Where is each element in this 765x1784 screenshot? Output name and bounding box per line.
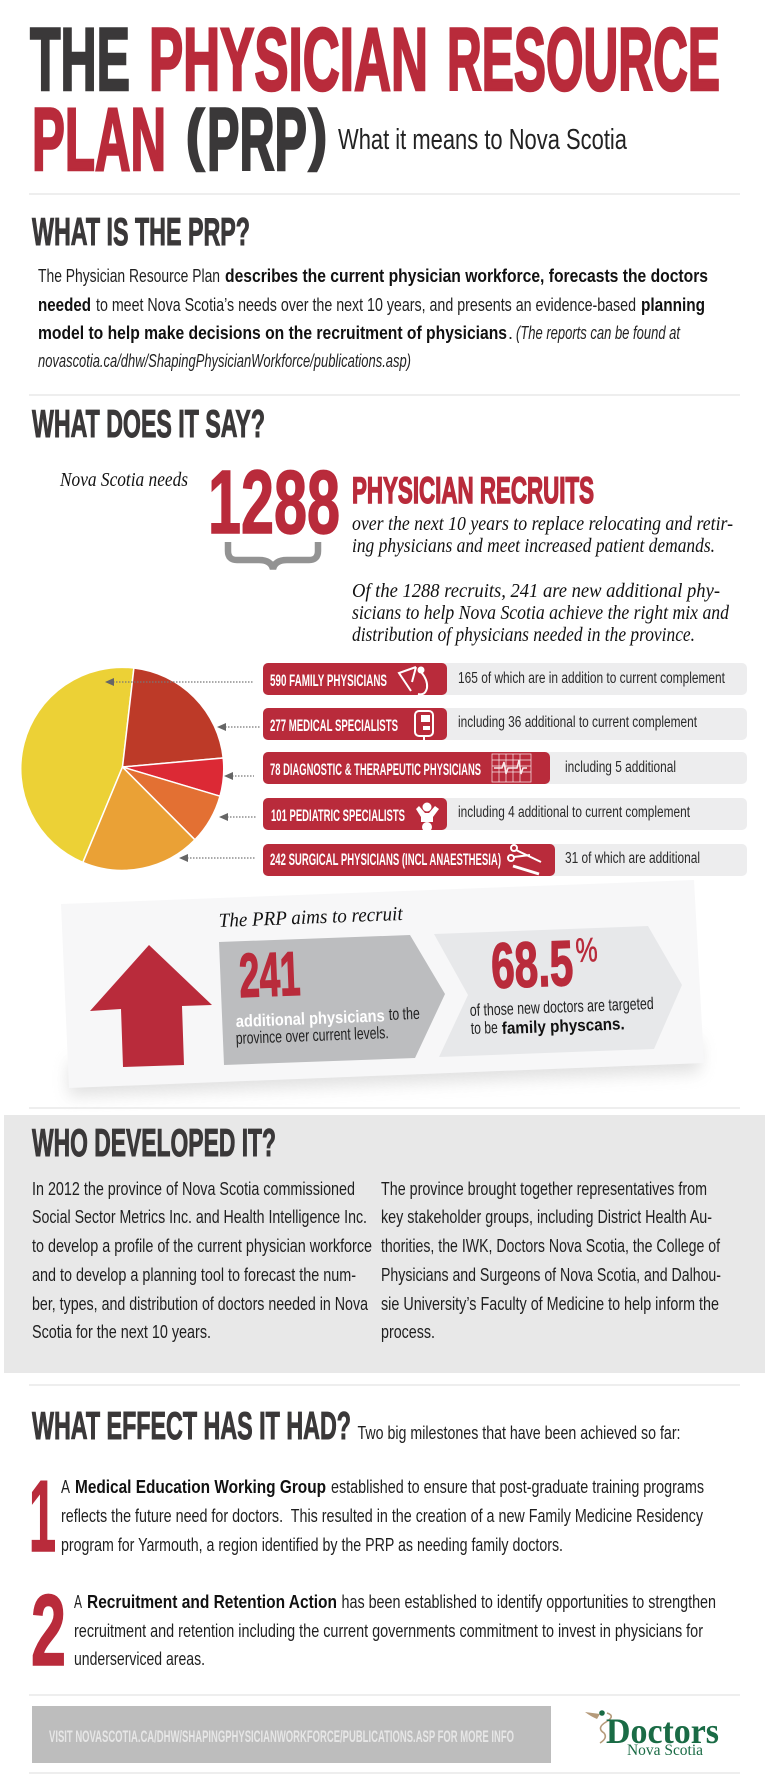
text block: left column: In 2012 the province of Nova Scotia commissioned [32, 1179, 355, 1199]
row: pediatric specialists [263, 798, 747, 832]
callout: 1288 physician recruits [59, 453, 733, 646]
heading: what effect has it had: WHAT EFFECT HAS IT HAD? [32, 1405, 351, 1448]
arrow: family physicians [105, 678, 253, 686]
icon: caduceus [585, 1710, 611, 1743]
callout: 241 additional physicians: 241 [238, 940, 301, 1011]
text block: PRP description [38, 266, 708, 371]
milestone 1: 1 [29, 1461, 56, 1573]
text block: right column: process. [381, 1322, 435, 1342]
row: diagnostic and therapeutic physicians [263, 752, 747, 784]
row: surgical physicians [263, 844, 747, 876]
arrow: medical specialists [217, 723, 260, 731]
milestone 1: Medical Education Working Group [75, 1477, 326, 1497]
logo: Doctors Nova Scotia: Doctors [606, 1711, 719, 1751]
text block: right column [381, 1179, 721, 1342]
title: THE [30, 9, 130, 109]
text block: PRP description: model to help make decisions on the recruitment of physicians [38, 323, 507, 343]
title: PRP [207, 89, 307, 189]
logo: Doctors Nova Scotia: Nova Scotia [627, 1742, 703, 1759]
callout: 1288 physician recruits: Of the 1288 recruits, 241 are new additional phy- [352, 580, 720, 602]
text block: PRP description: . [508, 323, 513, 343]
text block: PRP description: describes the current physician workforce, forecasts the doctors [225, 266, 708, 286]
callout: 68.5 percent: 68.5 [490, 927, 574, 1002]
row: family physicians: 590 FAMILY PHYSICIANS [270, 671, 387, 690]
footer link bar [32, 1706, 551, 1763]
title: PLAN [32, 89, 166, 189]
icon: up arrow [90, 945, 212, 1067]
callout: 68.5 percent: of those new doctors are targeted [469, 994, 654, 1020]
title [30, 9, 720, 189]
heading: who developed it: WHO DEVELOPED IT? [32, 1122, 276, 1165]
icon: surgical tools [508, 845, 541, 874]
text block: left column: to develop a profile of the current physician workforce [32, 1236, 372, 1256]
milestone 1 [29, 1461, 704, 1573]
panel: who developed it [4, 1115, 765, 1373]
callout: 1288 physician recruits: ing physicians and meet increased patient demands. [352, 535, 715, 557]
heading: what does it say: WHAT DOES IT SAY? [32, 403, 265, 446]
title: ( [186, 97, 205, 172]
milestone 2 [31, 1575, 716, 1687]
text block: left column: Scotia for the next 10 years. [32, 1322, 211, 1342]
callout: 68.5 percent [434, 926, 682, 1057]
callout: 68.5 percent: family physcans. [501, 1014, 625, 1038]
text block: PRP description: novascotia.ca/dhw/ShapingPhysicianWorkforce/publications.asp) [38, 351, 411, 371]
icon: stethoscope [399, 666, 427, 694]
row: medical specialists: including 36 additional to current complement [458, 714, 698, 731]
callout: 241 additional physicians: province over current levels. [235, 1023, 389, 1048]
title: ) [309, 97, 327, 172]
callout: 68.5 percent: % [575, 931, 598, 970]
heading: what is the PRP: WHAT IS THE PRP? [32, 211, 250, 254]
row: diagnostic and therapeutic physicians: including 5 additional [565, 759, 676, 776]
intro text: Two big milestones that have been achieved so far: [358, 1423, 680, 1443]
arrow: surgical physicians [179, 854, 255, 862]
callout: 241 additional physicians: to the [388, 1004, 420, 1024]
arrow: pediatric specialists [219, 813, 256, 821]
text block: PRP description: (The reports can be found at [516, 323, 681, 343]
icon: blood bag [415, 711, 433, 741]
panel: the PRP aims to recruit: The PRP aims to recruit [218, 903, 403, 932]
callout: 1288 physician recruits: PHYSICIAN RECRUITS [352, 470, 594, 511]
callout: 241 additional physicians [219, 935, 445, 1065]
row: medical specialists [263, 708, 747, 741]
pie chart [21, 667, 224, 870]
callout: 1288 physician recruits: 1288 [208, 453, 340, 553]
text block: PRP description: needed [38, 295, 91, 315]
callout: 68.5 percent: to be [470, 1018, 498, 1038]
arrow: diagnostic physicians [224, 772, 254, 780]
icon: baby [416, 802, 439, 832]
milestone 2: Recruitment and Retention Action [87, 1592, 337, 1612]
row: medical specialists: 277 MEDICAL SPECIALISTS [270, 716, 398, 735]
text block: left column: ber, types, and distribution of doctors needed in Nova [32, 1294, 369, 1314]
milestone 1: A [61, 1477, 70, 1497]
milestone 2: A [74, 1592, 82, 1612]
row: surgical physicians: 242 SURGICAL PHYSICIANS (INCL ANAESTHESIA) [270, 850, 501, 869]
callout: 241 additional physicians: additional physicians [235, 1006, 385, 1031]
callout: 1288 physician recruits: distribution of physicians needed in the province. [352, 624, 695, 646]
panel: the PRP aims to recruit [61, 880, 704, 1096]
title: PHYSICIAN [149, 9, 428, 109]
row: pediatric specialists: 101 PEDIATRIC SPECIALISTS [271, 806, 405, 825]
row: family physicians [263, 663, 747, 695]
row: diagnostic and therapeutic physicians: 78 DIAGNOSTIC & THERAPEUTIC PHYSICIANS [270, 760, 481, 779]
row: pediatric specialists: including 4 additional to current complement [458, 804, 691, 821]
icon: ECG chart [492, 754, 531, 782]
text block: left column: Social Sector Metrics Inc. and Health Intelligence Inc. [32, 1207, 367, 1227]
text block: left column: and to develop a planning tool to forecast the num- [32, 1265, 356, 1285]
text block: left column [32, 1179, 372, 1342]
milestone 2: 2 [31, 1575, 66, 1687]
subtitle: What it means to Nova Scotia [338, 124, 628, 156]
text block: PRP description: The Physician Resource Plan [38, 266, 220, 286]
logo: Doctors Nova Scotia [585, 1710, 719, 1759]
text block: PRP description: planning [641, 295, 705, 315]
milestone 1: program for Yarmouth, a region identified by the PRP as needing family doctors. [61, 1535, 563, 1555]
callout: 1288 physician recruits: Nova Scotia needs [59, 469, 188, 491]
row: surgical physicians: 31 of which are additional [565, 850, 700, 867]
milestone 2: underserviced areas. [74, 1649, 205, 1669]
text block: PRP description: to meet Nova Scotia’s needs over the next 10 years, and presents an evidence-based [96, 295, 636, 315]
icon: brace [228, 542, 318, 569]
